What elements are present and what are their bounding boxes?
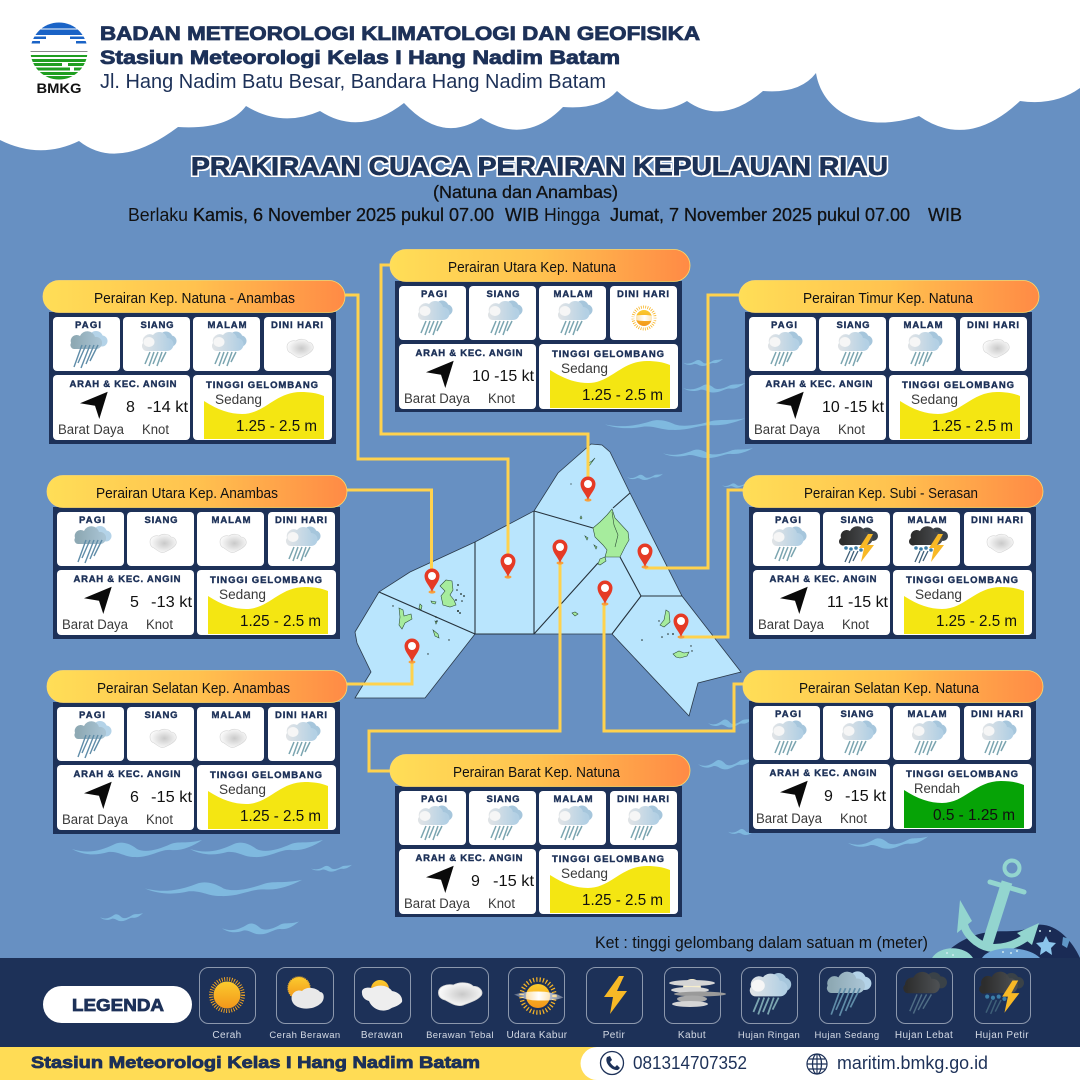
legend: Berawan: Berawan: [361, 1030, 403, 1041]
panel: Perairan Selatan Kep. Natuna: MALAM: [908, 709, 947, 720]
panel: Perairan Timur Kep. Natuna: Knot: [838, 422, 865, 437]
panel: Perairan Kep. Natuna - Anambas: ARAH & KEC. ANGIN: [70, 379, 177, 390]
legend: Hujan Lebat: [895, 968, 953, 1041]
panel: Perairan Selatan Kep. Natuna: SIANG: [840, 709, 874, 720]
icon: globe: [807, 1054, 827, 1074]
connector: Utara Anambas to pin: [347, 490, 432, 575]
panel: Perairan Utara Kep. Natuna: [390, 250, 690, 412]
legend: Hujan Sedang: [814, 968, 880, 1041]
panel: Perairan Kep. Subi - Serasan: ARAH & KEC. ANGIN: [770, 574, 877, 585]
panel: Perairan Kep. Natuna - Anambas: PAGI: [75, 320, 101, 331]
panel: Perairan Timur Kep. Natuna: MALAM: [904, 320, 943, 331]
panel: Perairan Timur Kep. Natuna: [739, 280, 1039, 444]
panel: Perairan Kep. Subi - Serasan: Sedang: [915, 587, 962, 602]
panel: Perairan Kep. Subi - Serasan: 1.25 - 2.5 m: [936, 613, 1017, 630]
panel: Perairan Kep. Subi - Serasan: DINI HARI: [971, 515, 1023, 526]
BMKG logo: BMKG: [36, 80, 82, 96]
panel: Perairan Kep. Subi - Serasan: TINGGI GELOMBANG: [906, 575, 1018, 586]
panel: Perairan Barat Kep. Natuna: Barat Daya: [404, 896, 470, 911]
note: Ket : tinggi gelombang dalam satuan m (meter): [595, 934, 928, 952]
panel: Perairan Selatan Kep. Natuna: Perairan Selatan Kep. Natuna: [799, 681, 980, 697]
panel: Perairan Kep. Natuna - Anambas: MALAM: [208, 320, 247, 331]
legend: Udara Kabur: Udara Kabur: [506, 1030, 568, 1041]
panel: Perairan Kep. Subi - Serasan: Knot: [842, 617, 869, 632]
panel: Perairan Utara Kep. Anambas: DINI HARI: [275, 515, 327, 526]
footer contact panel: maritim.bmkg.go.id: [837, 1053, 988, 1073]
panel: Perairan Utara Kep. Anambas: [47, 476, 347, 639]
validity period: WIB: [928, 205, 962, 225]
panel: Perairan Selatan Kep. Anambas: DINI HARI: [275, 710, 327, 721]
legend: Cerah: [200, 968, 256, 1041]
panel: Perairan Selatan Kep. Anambas: Sedang: [219, 782, 266, 797]
legend: Kabut: [664, 968, 726, 1041]
panel: Perairan Barat Kep. Natuna: -15 kt: [493, 873, 535, 890]
panel: Perairan Timur Kep. Natuna: Sedang: [911, 392, 958, 407]
panel: Perairan Timur Kep. Natuna: Perairan Timur Kep. Natuna: [803, 291, 974, 307]
panel: Perairan Selatan Kep. Anambas: PAGI: [79, 710, 105, 721]
panel: Perairan Utara Kep. Natuna: DINI HARI: [617, 289, 669, 300]
legend: Petir: [586, 968, 642, 1041]
header text: [100, 24, 700, 93]
panel: Perairan Barat Kep. Natuna: Sedang: [561, 866, 608, 881]
legend: Hujan Sedang: Hujan Sedang: [814, 1030, 880, 1041]
panel: Perairan Utara Kep. Natuna: Barat Daya: [404, 391, 470, 406]
panel: Perairan Kep. Subi - Serasan: MALAM: [908, 515, 947, 526]
connector: Subi Serasan to pin: [681, 490, 743, 637]
header cloud: [0, 0, 1080, 154]
legend heading: [43, 986, 192, 1023]
validity period: Kamis, 6 November 2025 pukul 07.00: [193, 205, 494, 225]
panel: Perairan Selatan Kep. Anambas: [47, 670, 347, 834]
panel: Perairan Utara Kep. Anambas: Barat Daya: [62, 617, 128, 632]
panel: Perairan Kep. Subi - Serasan: SIANG: [840, 515, 874, 526]
panel: Perairan Barat Kep. Natuna: [390, 754, 690, 917]
legend: Petir: Petir: [603, 1030, 626, 1041]
connector: Natuna-Anambas to pin: [345, 295, 508, 560]
validity period: Hingga: [544, 205, 601, 225]
legend: Berawan Tebal: [426, 968, 494, 1041]
panel: Perairan Kep. Subi - Serasan: Barat Daya: [758, 617, 824, 632]
panel: Perairan Utara Kep. Anambas: PAGI: [79, 515, 105, 526]
connector: Barat Natuna to pin: [369, 563, 560, 771]
legend: Hujan Ringan: Hujan Ringan: [738, 1030, 800, 1041]
legend: Hujan Petir: [974, 968, 1030, 1041]
footer contact panel: 081314707352: [633, 1053, 747, 1073]
legend: Hujan Lebat: Hujan Lebat: [895, 1030, 953, 1041]
panel: Perairan Kep. Natuna - Anambas: SIANG: [140, 320, 174, 331]
panel: Perairan Kep. Natuna - Anambas: Sedang: [215, 392, 262, 407]
panel: Perairan Kep. Natuna - Anambas: -14 kt: [147, 399, 189, 416]
panel: Perairan Selatan Kep. Natuna: [743, 670, 1043, 833]
panel: Perairan Utara Kep. Anambas: ARAH & KEC. ANGIN: [74, 574, 181, 585]
footer band: [0, 1047, 1080, 1080]
panel: Perairan Selatan Kep. Anambas: TINGGI GELOMBANG: [210, 770, 322, 781]
panel: Perairan Utara Kep. Anambas: -13 kt: [151, 594, 193, 611]
panel: Perairan Selatan Kep. Natuna: Rendah: [914, 781, 960, 796]
legend: Cerah Berawan: Cerah Berawan: [269, 1030, 341, 1041]
panel: Perairan Utara Kep. Anambas: Perairan Utara Kep. Anambas: [96, 486, 278, 502]
panel: Perairan Selatan Kep. Anambas: MALAM: [212, 710, 251, 721]
panel: Perairan Barat Kep. Natuna: SIANG: [486, 794, 520, 805]
footer contact panel: [581, 1047, 1080, 1080]
panel: Perairan Selatan Kep. Anambas: SIANG: [144, 710, 178, 721]
sea waves: [72, 359, 928, 934]
panel: Perairan Kep. Subi - Serasan: Perairan Kep. Subi - Serasan: [804, 486, 978, 502]
panel: Perairan Barat Kep. Natuna: ARAH & KEC. ANGIN: [416, 853, 523, 864]
panel: Perairan Utara Kep. Natuna: 1.25 - 2.5 m: [582, 387, 663, 404]
header text: BADAN METEOROLOGI KLIMATOLOGI DAN GEOFISIKA: [100, 24, 700, 45]
panel: Perairan Selatan Kep. Natuna: DINI HARI: [971, 709, 1023, 720]
legend heading: LEGENDA: [72, 995, 164, 1015]
legend: Cerah Berawan: [269, 968, 341, 1041]
legend: Hujan Petir: Hujan Petir: [975, 1030, 1029, 1041]
panel: Perairan Barat Kep. Natuna: Perairan Barat Kep. Natuna: [453, 765, 621, 781]
connector: Utara Natuna to pin: [381, 265, 588, 480]
legend: Berawan: [354, 968, 410, 1041]
legend: Hujan Ringan: [738, 968, 800, 1041]
subtitle: (Natuna dan Anambas): [433, 182, 618, 202]
panel: Perairan Utara Kep. Anambas: 1.25 - 2.5 m: [240, 613, 321, 630]
legend: Berawan Tebal: Berawan Tebal: [426, 1030, 494, 1041]
panel: Perairan Timur Kep. Natuna: 1.25 - 2.5 m: [932, 418, 1013, 435]
panel: Perairan Timur Kep. Natuna: Barat Daya: [754, 422, 820, 437]
panel: Perairan Utara Kep. Natuna: ARAH & KEC. ANGIN: [416, 348, 523, 359]
panel: Perairan Selatan Kep. Natuna: Barat Daya: [756, 811, 822, 826]
validity period: [128, 205, 962, 225]
panel: Perairan Selatan Kep. Anambas: Barat Daya: [62, 812, 128, 827]
validity period: Berlaku: [128, 205, 188, 225]
panel: Perairan Kep. Natuna - Anambas: 1.25 - 2.5 m: [236, 418, 317, 435]
panel: Perairan Barat Kep. Natuna: 1.25 - 2.5 m: [582, 892, 663, 909]
panel: Perairan Selatan Kep. Anambas: ARAH & KEC. ANGIN: [74, 769, 181, 780]
legend: Udara Kabur: [506, 968, 568, 1041]
panel: Perairan Utara Kep. Natuna: MALAM: [554, 289, 593, 300]
panel: Perairan Selatan Kep. Natuna: PAGI: [775, 709, 801, 720]
panel: Perairan Kep. Subi - Serasan: PAGI: [775, 515, 801, 526]
panel: Perairan Utara Kep. Anambas: SIANG: [144, 515, 178, 526]
panel: Perairan Selatan Kep. Anambas: 6: [130, 789, 139, 806]
map pins: [404, 476, 688, 664]
connector: Timur Natuna to pin: [645, 295, 739, 568]
anchor illustration: [932, 860, 1080, 958]
panel: Perairan Timur Kep. Natuna: PAGI: [771, 320, 797, 331]
header text: Jl. Hang Nadim Batu Besar, Bandara Hang Nadim Batam: [100, 71, 606, 93]
panel: Perairan Selatan Kep. Natuna: 9: [824, 788, 833, 805]
panel: Perairan Barat Kep. Natuna: DINI HARI: [617, 794, 669, 805]
panel: Perairan Selatan Kep. Anambas: Knot: [146, 812, 173, 827]
map: Natuna and Anambas waters: [355, 444, 741, 716]
panel: Perairan Kep. Natuna - Anambas: TINGGI GELOMBANG: [206, 380, 318, 391]
panel: Perairan Barat Kep. Natuna: TINGGI GELOMBANG: [552, 854, 664, 865]
panel: Perairan Selatan Kep. Anambas: 1.25 - 2.5 m: [240, 808, 321, 825]
panel: Perairan Timur Kep. Natuna: TINGGI GELOMBANG: [902, 380, 1014, 391]
panel: Perairan Barat Kep. Natuna: PAGI: [421, 794, 447, 805]
panel: Perairan Kep. Subi - Serasan: 11 -15 kt: [827, 594, 889, 611]
panel: Perairan Kep. Natuna - Anambas: Knot: [142, 422, 169, 437]
panel: Perairan Timur Kep. Natuna: DINI HARI: [967, 320, 1019, 331]
panel: Perairan Barat Kep. Natuna: MALAM: [554, 794, 593, 805]
panel: Perairan Utara Kep. Natuna: 10 -15 kt: [472, 368, 535, 385]
panel: Perairan Utara Kep. Natuna: PAGI: [421, 289, 447, 300]
legend bar: [0, 958, 1080, 1047]
panel: Perairan Timur Kep. Natuna: 10 -15 kt: [822, 399, 885, 416]
panel: Perairan Kep. Natuna - Anambas: Barat Daya: [58, 422, 124, 437]
panel: Perairan Selatan Kep. Anambas: Perairan Selatan Kep. Anambas: [97, 681, 290, 697]
connector: Selatan Natuna to pin: [604, 604, 743, 731]
panel: Perairan Timur Kep. Natuna: ARAH & KEC. ANGIN: [766, 379, 873, 390]
connector: Selatan Anambas to pin: [347, 662, 412, 684]
panel: Perairan Utara Kep. Anambas: TINGGI GELOMBANG: [210, 575, 322, 586]
panel: Perairan Selatan Kep. Natuna: -15 kt: [845, 788, 887, 805]
panel: Perairan Selatan Kep. Natuna: 0.5 - 1.25 m: [933, 807, 1015, 824]
panel: Perairan Utara Kep. Anambas: Knot: [146, 617, 173, 632]
legend: Cerah: Cerah: [212, 1030, 242, 1041]
BMKG logo: [30, 22, 88, 93]
panel: Perairan Utara Kep. Natuna: Perairan Utara Kep. Natuna: [448, 260, 617, 276]
validity period: Jumat, 7 November 2025 pukul 07.00: [610, 205, 910, 225]
panel: Perairan Timur Kep. Natuna: SIANG: [836, 320, 870, 331]
panel: Perairan Kep. Subi - Serasan: [743, 476, 1043, 639]
validity period: WIB: [505, 205, 539, 225]
panel: Perairan Kep. Natuna - Anambas: Perairan Kep. Natuna - Anambas: [94, 291, 295, 307]
panel: Perairan Selatan Kep. Natuna: TINGGI GELOMBANG: [906, 769, 1018, 780]
footer station name: Stasiun Meteorologi Kelas I Hang Nadim Batam: [31, 1053, 480, 1072]
panel: Perairan Selatan Kep. Natuna: ARAH & KEC. ANGIN: [770, 768, 877, 779]
header text: Stasiun Meteorologi Kelas I Hang Nadim Batam: [100, 48, 620, 69]
panel: Perairan Utara Kep. Natuna: Sedang: [561, 361, 608, 376]
panel: Perairan Kep. Natuna - Anambas: [43, 280, 345, 444]
panel: Perairan Utara Kep. Natuna: Knot: [488, 391, 515, 406]
panel: Perairan Utara Kep. Anambas: MALAM: [212, 515, 251, 526]
panel: Perairan Utara Kep. Natuna: SIANG: [486, 289, 520, 300]
panel: Perairan Selatan Kep. Natuna: Knot: [840, 811, 867, 826]
title: PRAKIRAAN CUACA PERAIRAN KEPULAUAN RIAU: [191, 153, 888, 181]
panel: Perairan Utara Kep. Anambas: 5: [130, 594, 139, 611]
panel: Perairan Utara Kep. Natuna: TINGGI GELOMBANG: [552, 349, 664, 360]
panel: Perairan Kep. Natuna - Anambas: DINI HARI: [271, 320, 323, 331]
panel: Perairan Barat Kep. Natuna: 9: [471, 873, 480, 890]
panel: Perairan Barat Kep. Natuna: Knot: [488, 896, 515, 911]
legend: Kabut: Kabut: [678, 1030, 706, 1041]
panel: Perairan Kep. Natuna - Anambas: 8: [126, 399, 135, 416]
icon: phone: [600, 1052, 624, 1074]
panel: Perairan Utara Kep. Anambas: Sedang: [219, 587, 266, 602]
panel: Perairan Selatan Kep. Anambas: -15 kt: [151, 789, 193, 806]
